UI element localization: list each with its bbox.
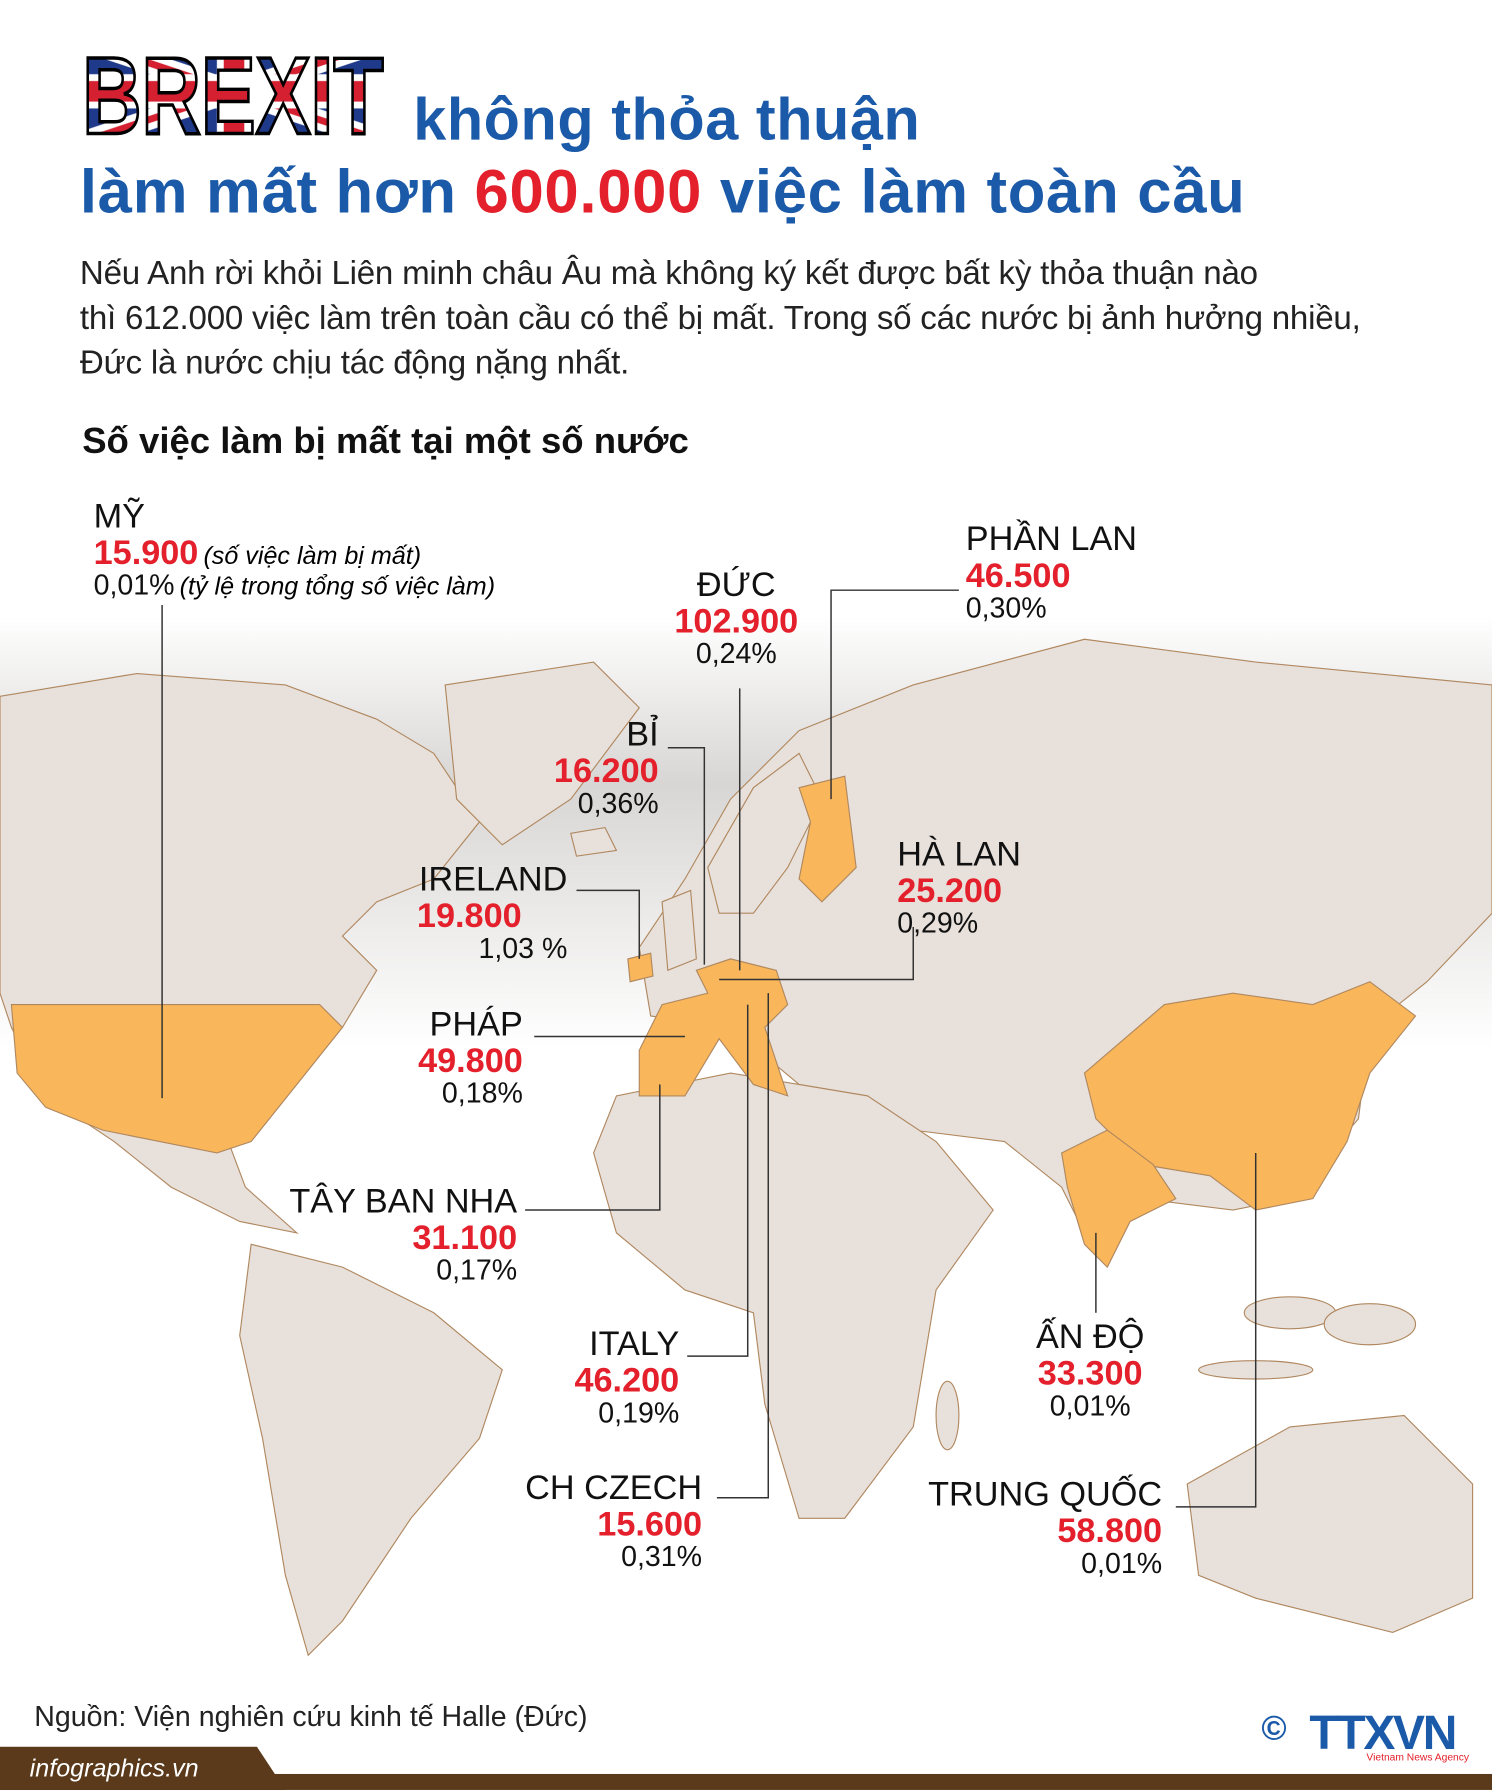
label: Duc: ĐỨC <box>697 566 776 604</box>
label: An Do <box>1036 1317 1144 1422</box>
title <box>80 40 1246 226</box>
leader lines <box>162 590 1256 1507</box>
footer bar <box>0 1774 1492 1790</box>
intro text: Đức là nước chịu tác động nặng nhất. <box>80 345 629 381</box>
label: Tay Ban Nha <box>289 1182 517 1287</box>
label: Ha Lan: 0,29% <box>897 908 978 939</box>
label: Ha Lan <box>897 836 1021 939</box>
intro text: thì 612.000 việc làm trên toàn cầu có thể bị mất. Trong số các nước bị ảnh hưởng nhiều, <box>80 300 1361 337</box>
label: Ireland: IRELAND <box>419 861 567 898</box>
label: Phap: 0,18% <box>442 1078 523 1110</box>
label: Ha Lan: 25.200 <box>897 872 1002 909</box>
label: Phap <box>418 1006 523 1110</box>
label: Ha Lan: HÀ LAN <box>897 836 1021 873</box>
label: Ireland: 1,03 % <box>478 933 567 965</box>
subtitle: Số việc làm bị mất tại một số nước <box>82 420 689 461</box>
intro text <box>80 254 1361 381</box>
footer tab: infographics.vn <box>0 1747 285 1790</box>
label: My: MỸ <box>94 498 145 535</box>
label: Phan Lan: 46.500 <box>966 557 1071 594</box>
label: Trung Quoc <box>928 1474 1162 1580</box>
label: Bi <box>554 714 659 820</box>
label: Tay Ban Nha: 31.100 <box>412 1219 517 1256</box>
label: Trung Quoc: 0,01% <box>1081 1548 1162 1580</box>
label: Duc: 102.900 <box>674 602 798 640</box>
logo: TTXVN: © <box>1261 1710 1287 1748</box>
label: CH Czech: 0,31% <box>621 1541 702 1573</box>
label: Italy: 46.200 <box>574 1361 679 1399</box>
logo: TTXVN: Vietnam News Agency <box>1366 1751 1469 1763</box>
label: Phan Lan: PHẦN LAN <box>966 521 1137 558</box>
label: Duc <box>674 566 798 670</box>
label: Trung Quoc: TRUNG QUỐC <box>928 1476 1162 1514</box>
logo: TTXVN <box>1261 1705 1469 1763</box>
label: My: 0,01% (tỷ lệ trong tổng số việc làm) <box>94 570 495 602</box>
label: An Do: ẤN ĐỘ <box>1036 1318 1144 1356</box>
label: CH Czech: 15.600 <box>597 1505 702 1543</box>
label: Trung Quoc: 58.800 <box>1057 1512 1162 1550</box>
label: Phan Lan <box>966 519 1137 624</box>
label: My: 15.900 (số việc làm bị mất) <box>94 534 421 571</box>
label: Phap: 49.800 <box>418 1042 523 1079</box>
logo: TTXVN: TTXVN <box>1309 1705 1455 1759</box>
label: Bi: 16.200 <box>554 752 659 789</box>
label: Bi: 0,36% <box>578 788 659 820</box>
label: Phap: PHÁP <box>430 1006 523 1043</box>
label: Italy: 0,19% <box>598 1397 679 1429</box>
source: Nguồn: Viện nghiên cứu kinh tế Halle (Đức) <box>34 1701 588 1733</box>
label: CH Czech: CH CZECH <box>525 1469 702 1507</box>
label: Tay Ban Nha: TÂY BAN NHA <box>289 1183 517 1220</box>
label: Duc: 0,24% <box>696 638 777 670</box>
title: không thỏa thuận <box>413 87 920 153</box>
footer tab: infographics.vn: infographics.vn <box>30 1753 199 1782</box>
label: An Do: 33.300 <box>1038 1354 1143 1392</box>
label: My <box>94 498 495 602</box>
label: Tay Ban Nha: 0,17% <box>436 1255 517 1287</box>
background map gradient <box>0 616 1492 1096</box>
label: Phan Lan: 0,30% <box>966 592 1047 624</box>
label: CH Czech <box>525 1469 702 1573</box>
label: Italy <box>574 1325 679 1429</box>
label: Bi: BỈ <box>626 716 659 753</box>
label: Italy: ITALY <box>589 1325 679 1363</box>
label: Ireland <box>417 861 567 965</box>
title: làm mất hơn 600.000 việc làm toàn cầu <box>80 158 1246 226</box>
label: An Do: 0,01% <box>1050 1390 1131 1422</box>
label: Ireland: 19.800 <box>417 897 522 934</box>
intro text: Nếu Anh rời khỏi Liên minh châu Âu mà không ký kết được bất kỳ thỏa thuận nào <box>80 256 1258 292</box>
